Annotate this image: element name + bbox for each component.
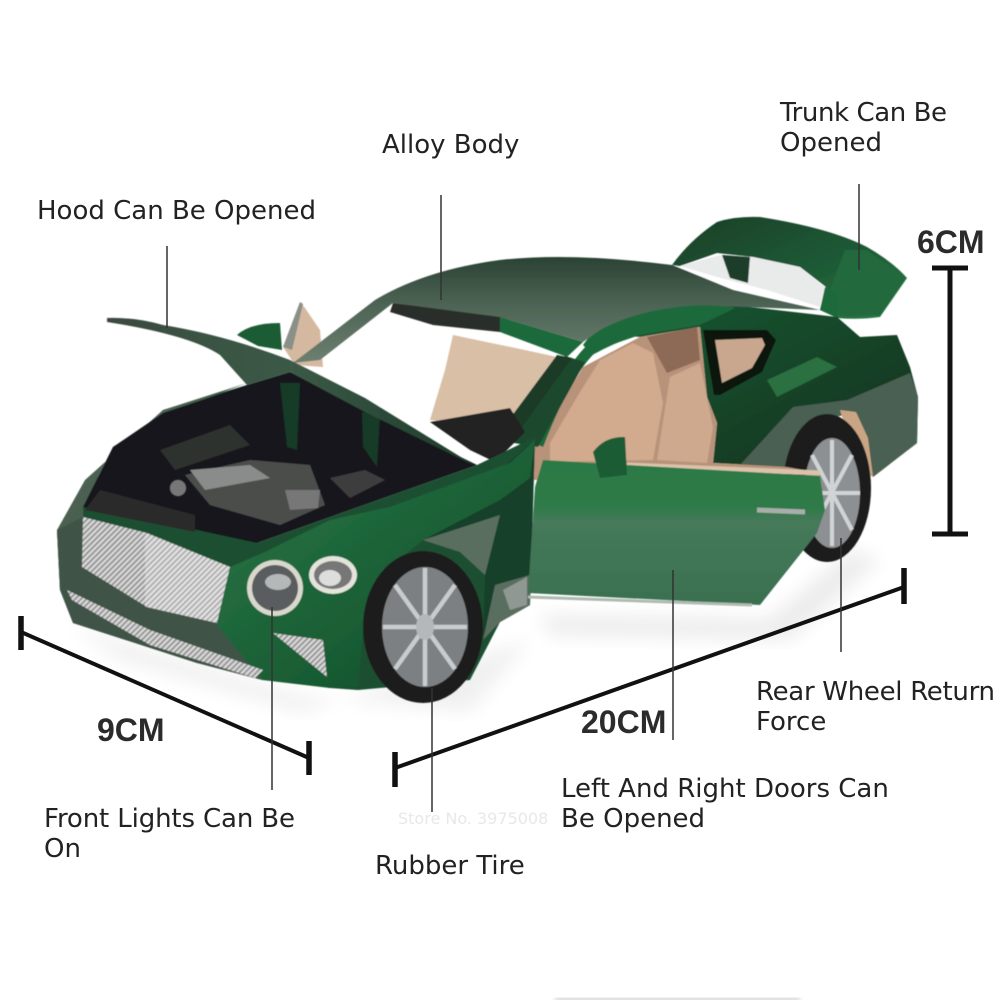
- watermark: Store No. 3975008: [398, 809, 548, 828]
- icon: open door: [528, 437, 825, 605]
- interior: front and rear seats: [533, 327, 820, 480]
- rear body: [597, 305, 918, 477]
- car illustration: [57, 217, 918, 712]
- callout: doors: Left And Right Doors Can: [561, 774, 889, 804]
- callout: doors: [561, 570, 889, 834]
- arch highlight: [583, 298, 735, 352]
- callout: doors: Be Opened: [561, 804, 705, 834]
- front seat through windshield: [430, 335, 585, 462]
- far door and mirror: [237, 302, 323, 367]
- callout: trunk: Trunk Can Be: [779, 98, 947, 128]
- callout: rear wheel: Force: [756, 707, 826, 737]
- front body: [57, 385, 535, 690]
- callout: front lights: On: [44, 834, 81, 864]
- icon: headlights: [247, 556, 357, 616]
- callout: front lights: [44, 607, 295, 864]
- callout: trunk: [779, 98, 947, 270]
- icon: open trunk lid: [672, 217, 907, 319]
- grille: [82, 517, 230, 623]
- measure: length 20CM: 20CM: [581, 704, 666, 740]
- measure: length 20CM: [395, 568, 904, 787]
- engine bay: [83, 372, 477, 543]
- roof: [293, 257, 820, 363]
- callout: rear wheel: [756, 538, 995, 737]
- callout: tire: Rubber Tire: [375, 851, 525, 881]
- measure: height 6CM: 6CM: [917, 224, 985, 260]
- callout: hood: Hood Can Be Opened: [37, 196, 316, 226]
- callout: rear wheel: Rear Wheel Return: [756, 677, 995, 707]
- measure: width 9CM: [21, 616, 309, 775]
- side vent: [503, 577, 527, 610]
- callout: front lights: Front Lights Can Be: [44, 804, 295, 834]
- callout: trunk: Opened: [780, 128, 882, 158]
- lower bumper meshes: [67, 590, 327, 678]
- icon: open hood: [107, 318, 477, 467]
- quarter window: [703, 330, 776, 395]
- callout: alloy body: Alloy Body: [382, 130, 519, 160]
- icon: front wheel: [363, 551, 483, 703]
- trunk opening: [680, 255, 825, 307]
- measure: width 9CM: 9CM: [97, 712, 165, 748]
- icon: rear wheel: [783, 414, 871, 562]
